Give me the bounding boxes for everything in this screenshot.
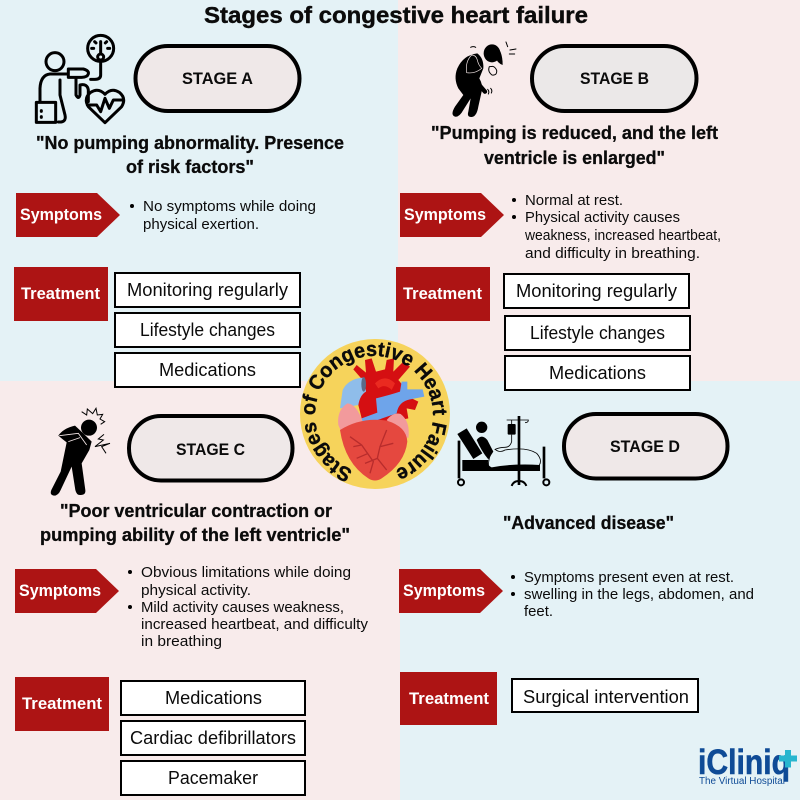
symptoms arrow	[400, 193, 504, 237]
treatment box	[512, 679, 698, 712]
treatment boxes	[504, 274, 690, 390]
symptoms arrow: Symptoms	[403, 582, 485, 600]
stage label: STAGE D	[610, 437, 680, 456]
treatment label: Treatment	[22, 695, 103, 713]
symptoms list: Obvious limitations while doing	[141, 565, 351, 581]
symptoms arrow: Symptoms	[404, 206, 486, 224]
symptoms list: increased heartbeat, and difficulty	[141, 617, 369, 633]
symptoms arrow	[15, 569, 119, 613]
symptoms list	[512, 193, 721, 262]
icon: blood pressure check	[36, 35, 124, 123]
stage description: "Pumping is reduced, and the left	[431, 122, 718, 143]
symptoms list: weakness, increased heartbeat,	[524, 228, 721, 244]
treatment label: Treatment	[409, 690, 490, 708]
stage description: pumping ability of the left ventricle"	[40, 524, 350, 545]
icon: person with chest pain	[51, 408, 110, 496]
stage label	[136, 46, 300, 111]
stage description: ventricle is enlarged"	[484, 147, 665, 168]
symptoms list: No symptoms while doing	[143, 199, 316, 215]
treatment boxes: Monitoring regularly	[127, 280, 288, 300]
treatment label	[400, 672, 497, 725]
symptoms list: Normal at rest.	[525, 193, 623, 209]
treatment boxes: Lifestyle changes	[530, 323, 665, 343]
emblem curved title	[315, 356, 433, 470]
stage description: "No pumping abnormality. Presence	[36, 132, 344, 153]
treatment boxes: Pacemaker	[168, 768, 258, 788]
symptoms list: and difficulty in breathing.	[525, 246, 700, 262]
symptoms list: feet.	[524, 604, 553, 620]
treatment label	[396, 267, 490, 321]
treatment boxes	[121, 681, 305, 795]
panel: stage C	[15, 408, 369, 795]
symptoms list: physical activity.	[141, 583, 251, 599]
stage description: "Poor ventricular contraction or	[60, 500, 332, 521]
stage label	[532, 46, 696, 111]
treatment box: Surgical intervention	[523, 687, 689, 707]
stage description: "Advanced disease"	[503, 512, 674, 533]
treatment label	[15, 677, 109, 731]
panel: stage D	[399, 414, 754, 725]
symptoms list: swelling in the legs, abdomen, and	[524, 587, 754, 603]
central emblem: heart badge: Stages of Congestive Heart Failure	[302, 342, 447, 482]
symptoms list: Symptoms present even at rest.	[524, 570, 734, 586]
panel: stage A	[14, 35, 344, 387]
icon: patient in hospital bed	[457, 416, 549, 486]
treatment label	[14, 267, 108, 321]
symptoms arrow: Symptoms	[20, 206, 102, 224]
treatment boxes: Lifestyle changes	[140, 320, 275, 340]
symptoms list	[128, 565, 369, 650]
stage label: STAGE B	[580, 69, 649, 88]
treatment label: Treatment	[21, 285, 101, 303]
treatment boxes: Cardiac defibrillators	[130, 728, 296, 748]
treatment boxes: Medications	[159, 360, 256, 380]
icon: anatomical heart	[338, 358, 424, 480]
symptoms arrow	[399, 569, 503, 613]
stage description	[40, 500, 350, 545]
stage label: STAGE C	[176, 440, 245, 459]
icon: person with weakness	[452, 42, 516, 117]
stage label	[129, 416, 292, 480]
stage description	[431, 122, 718, 168]
treatment boxes: Monitoring regularly	[516, 281, 677, 301]
symptoms list: Physical activity causes	[525, 210, 680, 226]
stage label	[564, 414, 728, 478]
symptoms arrow	[16, 193, 120, 237]
stage label: STAGE A	[182, 69, 253, 88]
title: Stages of congestive heart failure	[204, 2, 588, 28]
panel: stage B	[396, 42, 721, 390]
treatment boxes: Medications	[165, 688, 262, 708]
symptoms list: Mild activity causes weakness,	[141, 600, 344, 616]
symptoms arrow: Symptoms	[19, 582, 101, 600]
stage description: of risk factors"	[126, 156, 254, 177]
treatment boxes: Medications	[549, 363, 646, 383]
symptoms list	[511, 570, 754, 620]
stage description	[36, 132, 344, 177]
symptoms list: physical exertion.	[143, 217, 259, 233]
symptoms list: in breathing	[141, 634, 222, 650]
logo: iCliniq: The Virtual Hospital	[699, 776, 785, 787]
treatment boxes	[115, 273, 300, 387]
symptoms list	[130, 199, 316, 233]
treatment label: Treatment	[403, 285, 483, 303]
